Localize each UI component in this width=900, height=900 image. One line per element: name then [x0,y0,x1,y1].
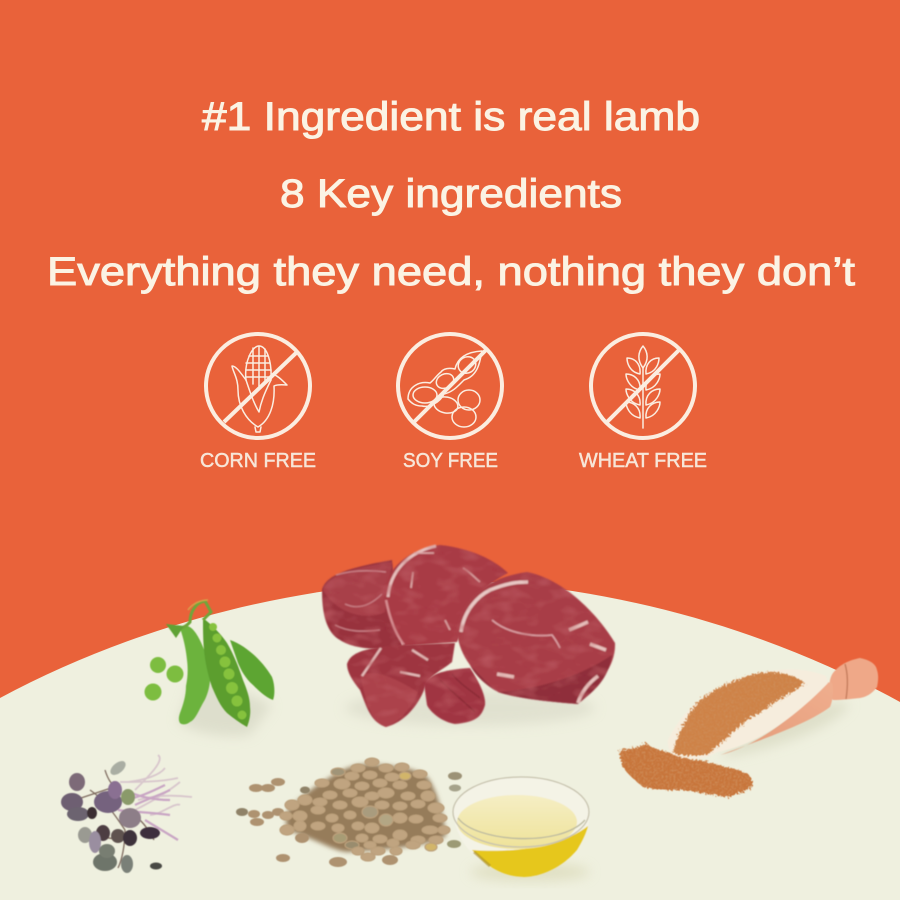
image: glass bowl of oil [453,777,590,881]
oil surface [457,795,577,849]
open pea pod [203,618,250,727]
left steak [322,560,402,649]
heading: key ingredients: 8 Key ingredients [280,172,622,216]
peas in pod [209,623,246,720]
prohibition ring [206,334,310,438]
scoop handle [829,658,878,700]
yellow oil base [472,826,588,877]
icon: wheat free [591,334,695,438]
slash [414,350,486,422]
bowl body [453,777,590,877]
icon: corn free [206,334,310,438]
grain pile [620,743,752,797]
image: wooden scoop with ground grain [620,658,878,797]
middle steak [384,545,508,646]
label: wheat free: WHEAT FREE [579,450,707,472]
icon: soy free [398,334,502,438]
image: purple microgreens [61,755,192,873]
grain in scoop [673,672,805,756]
scoop body [720,682,833,755]
back pea pod [230,640,274,700]
loose peas [150,657,166,673]
right steak [457,572,615,704]
label: corn free: CORN FREE [200,450,316,472]
closed pea pod [179,626,211,724]
slash [224,353,296,422]
meat chunk: left group [347,643,455,727]
pea stems [172,601,211,629]
slash [607,350,679,422]
heading: real lamb: #1 Ingredient is real lamb [202,95,700,139]
scoop rim [668,669,828,760]
heading: everything they need: Everything they need, nothing they don’t [47,250,855,294]
prohibition ring [591,334,695,438]
cream curved ground [0,580,900,900]
image: sugar snap peas [144,600,274,736]
lentil pile [280,758,450,861]
label: soy free: SOY FREE [403,450,498,472]
image: lamb meat cuts [322,545,615,727]
meat chunk: front [424,668,485,724]
stray lentils [236,772,462,867]
bowl rim [453,777,589,847]
prohibition ring [398,334,502,438]
image: lentils [236,758,462,867]
